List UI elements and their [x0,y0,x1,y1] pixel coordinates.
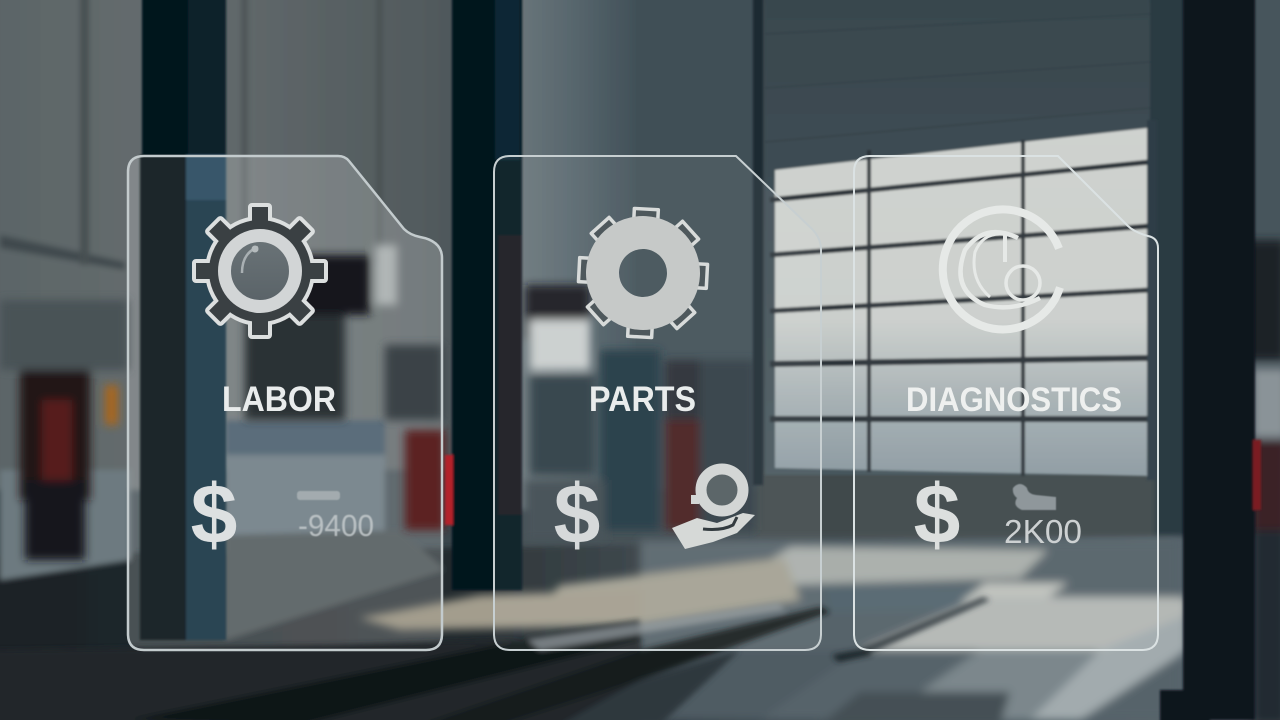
icon: diagnostics rings [943,209,1060,329]
diagnostics cost label [1004,484,1082,550]
labor cost label: -9400 [298,508,374,543]
panel outline: labor [128,156,442,650]
floor light patches [359,540,1187,720]
background objects [0,240,1280,720]
icon: labor gear [196,207,324,335]
diagnostics cost label: 2K00 [1004,513,1082,550]
icon: labor dollar sign: $ [191,467,237,561]
heading: labor: LABOR [222,380,336,419]
panel: diagnostics [854,156,1158,650]
panel: labor [128,156,442,650]
floor dark streaks [0,597,990,720]
panel outline: diagnostics [854,156,1158,650]
labor cost label [297,491,374,543]
roller door [753,0,1157,485]
labor panel tint over wall [128,156,442,650]
icon: parts dollar sign: $ [554,467,600,561]
panel: parts [494,156,821,650]
icon: diagnostics dollar sign: $ [914,467,960,561]
heading: parts: PARTS [589,380,696,419]
panel outline: parts [494,156,821,650]
heading: diagnostics: DIAGNOSTICS [906,381,1122,419]
icon: hand holding part [672,469,755,549]
icon: parts gear [576,206,710,340]
